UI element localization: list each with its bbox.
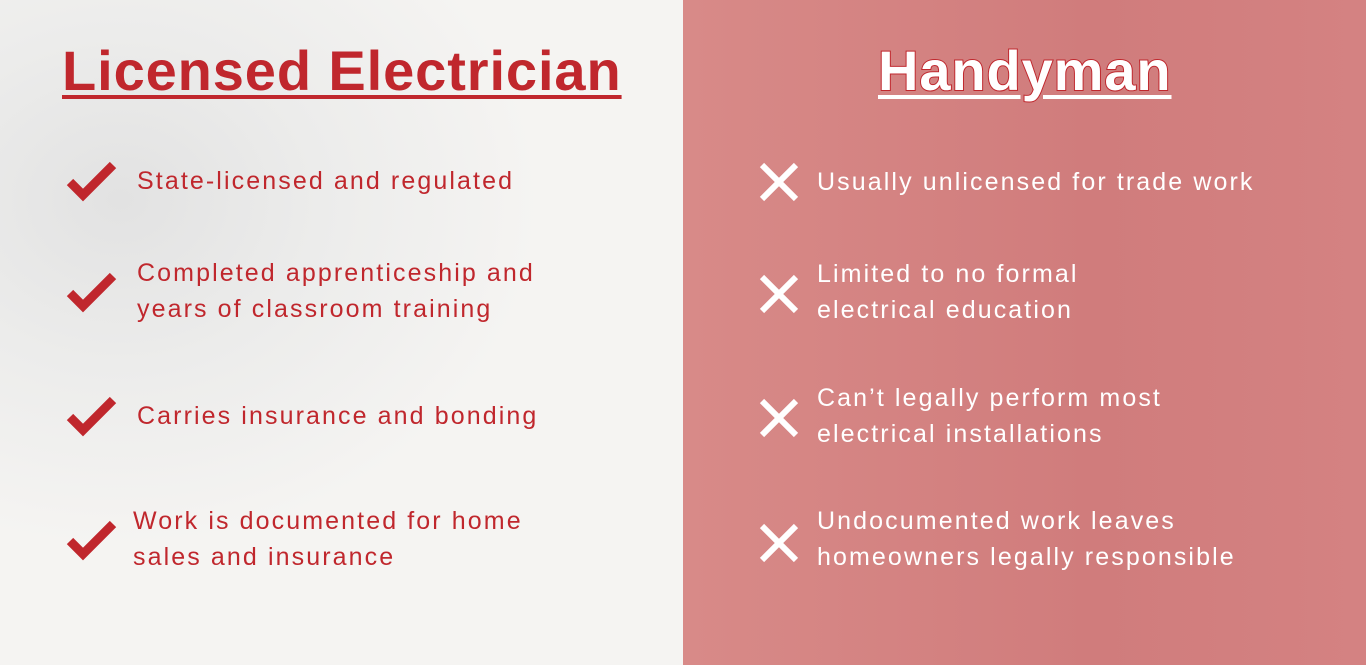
item 3: electrical installations — [817, 420, 1104, 448]
title: Handyman: Handyman — [878, 39, 1172, 102]
item 2: years of classroom training — [137, 295, 492, 323]
item 2 — [66, 259, 535, 323]
item 1 — [66, 162, 514, 202]
title: Licensed Electrician: Licensed Electrician — [62, 39, 622, 102]
item 1: State-licensed and regulated — [137, 167, 514, 195]
item 3: Carries insurance and bonding — [137, 402, 538, 430]
item 4: sales and insurance — [133, 543, 395, 571]
item 2: Completed apprenticeship and — [137, 259, 535, 287]
item 3: Can’t legally perform most — [817, 384, 1162, 412]
item 2 — [760, 260, 1079, 324]
item 3 — [760, 384, 1162, 448]
item 4: Work is documented for home — [133, 507, 523, 535]
item 4 — [760, 507, 1236, 571]
panel: licensed electrician — [0, 0, 683, 665]
item 2: electrical education — [817, 296, 1073, 324]
item 2: Limited to no formal — [817, 260, 1079, 288]
item 3 — [66, 396, 538, 436]
item 1: Usually unlicensed for trade work — [817, 168, 1255, 196]
item 1 — [760, 162, 1255, 201]
item 4: homeowners legally responsible — [817, 543, 1236, 571]
panel: handyman — [683, 0, 1366, 665]
item 4: Undocumented work leaves — [817, 507, 1176, 535]
item 4 — [66, 507, 523, 571]
